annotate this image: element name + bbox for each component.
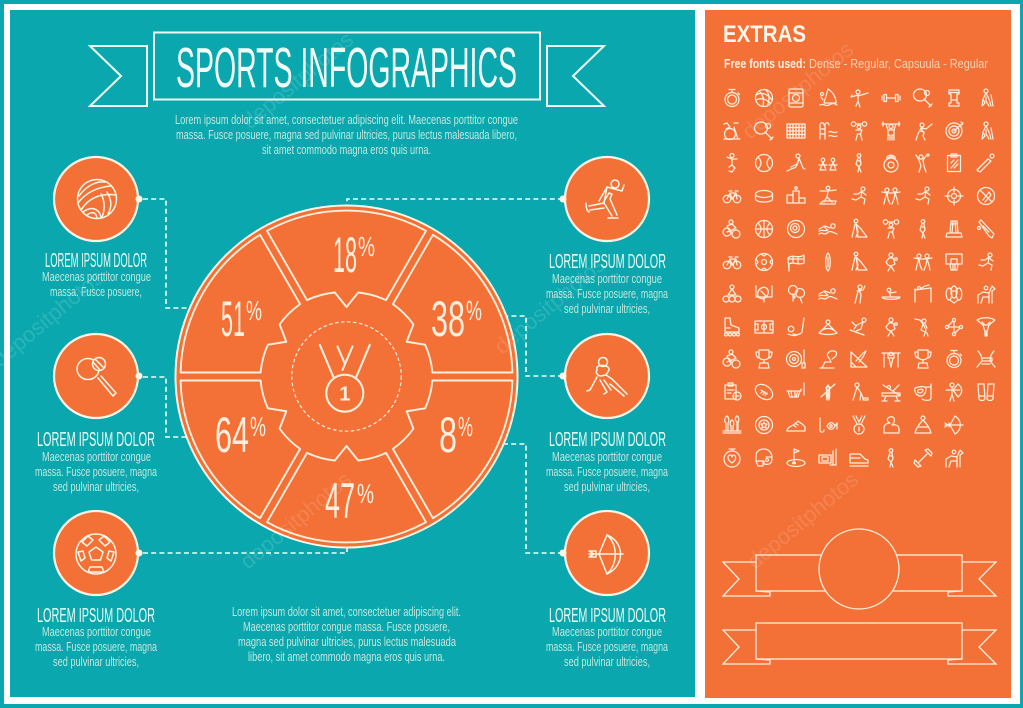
value 51%: 51 [221,291,245,347]
body: massa. Fusce posuere, magna [546,287,668,301]
fonts note [724,57,988,71]
body: massa. Fusce posuere, magna [546,640,668,654]
intro text: sit amet commodo magna eros quis urna. [262,143,431,157]
panel: extras orange [705,10,1011,698]
footer text [232,605,461,664]
intro text: massa. Fusce posuere, magna sed pulvinar ultricies, purus lectus malesuada libero, [176,128,517,142]
body: sed pulvinar ultricies, [564,302,650,316]
circle badge [560,511,649,595]
value 18%: % [358,231,375,262]
intro text: Lorem ipsum dolor sit amet, consectetuer adipiscing elit. Maecenas porttitor congue [175,113,518,127]
body: Maecenas porttitor congue [552,272,662,286]
icon: medal [320,345,370,412]
row 12 icons [724,449,963,467]
text: LOREM IPSUM DOLOR [45,250,147,272]
value 64%: 64 [215,407,249,463]
circle badge [54,334,142,418]
row 10 icons [725,381,994,403]
circle badge [54,511,142,595]
body: sed pulvinar ultricies, [564,480,650,494]
fonts note: Free fonts used: [724,57,806,71]
icon: medal: 1 [339,384,350,406]
body: Maecenas porttitor congue [42,625,151,639]
circle badge [54,157,142,241]
row 7 icons [723,285,995,303]
body: massa. Fusce posuere, [50,285,142,299]
heading: LOREM IPSUM DOLOR [549,251,666,273]
row 1 icons [725,89,993,107]
icon: volleyball [78,180,116,218]
fonts note: Dense - Regular, Capsuula - Regular [809,57,988,71]
body [35,625,157,669]
footer text: Lorem ipsum dolor sit amet, consectetuer adipiscing elit. [232,605,461,619]
ribbon plain [723,623,996,664]
dashed inner ring [292,322,401,431]
circle badge [560,334,649,418]
icon: speed skater [586,180,624,218]
value 47%: 47 [325,473,355,529]
callout: archery [546,511,668,669]
extras heading: EXTRAS [723,21,806,48]
wheel disc [176,206,518,548]
callout: hockey [546,334,668,494]
title banner: SPORTS INFOGRAPHICS [176,36,517,100]
panel: main teal [10,10,695,697]
value 51%: % [246,295,262,326]
callout: volleyball [42,157,151,299]
footer text: libero, sit amet commodo magna eros quis urna. [248,650,445,664]
wheel chart [163,206,530,548]
body [546,272,668,316]
heading: LOREM IPSUM DOLOR [549,429,666,451]
icon: racket and ball [77,358,116,396]
body [35,450,157,494]
ribbon with circle [723,529,996,609]
callout: skater [546,157,668,316]
heading: LOREM IPSUM DOLOR [549,605,666,627]
watermarks [0,27,863,574]
heading: LOREM IPSUM DOLOR [37,429,155,451]
value 8%: 8 [439,407,457,463]
body [546,450,668,494]
value 8%: % [458,411,473,442]
watermarks: depositphotos [489,252,610,359]
title box [154,32,540,100]
intro text [175,113,518,157]
watermarks: depositphotos [235,467,356,574]
row 2 icons [724,122,993,140]
icon: bow and arrow [589,535,623,574]
callout: tennis [35,334,157,494]
body [546,625,668,669]
row 5 icons [723,219,994,238]
footer text: magna sed pulvinar ultricies, purus lectus malesuada [238,635,456,649]
body: massa. Fusce posuere, magna [546,465,668,479]
body: sed pulvinar ultricies, [564,655,650,669]
body [42,270,151,299]
value 18%: 18 [333,227,357,283]
value 47%: % [357,478,374,509]
watermarks: depositphotos [237,27,358,134]
footer text: Maecenas porttitor congue massa. Fusce posuere, [243,620,450,634]
body: sed pulvinar ultricies, [53,480,139,494]
circle badge [560,157,649,241]
callout: soccer [35,511,157,669]
wheel segments [163,211,530,542]
value 64%: % [250,411,266,442]
title banner [90,32,604,106]
body: Maecenas porttitor congue [552,450,662,464]
value 38%: % [466,295,482,326]
body: sed pulvinar ultricies, [53,655,139,669]
ribbon right [547,46,604,106]
icon: soccer ball [76,534,116,574]
watermarks: depositphotos [742,467,863,574]
row 3 icons [727,154,994,172]
icon set grid [723,89,995,467]
row 8 icons [724,318,995,336]
row 9 icons [723,350,995,368]
body: Maecenas porttitor congue [42,450,151,464]
ribbon left [90,46,147,106]
icon: hockey player [587,358,627,396]
value 38%: 38 [431,291,465,347]
body: Maecenas porttitor congue [42,270,151,284]
dashed connectors [143,199,563,553]
row 4 icons [723,186,994,205]
body: Maecenas porttitor congue [552,625,662,639]
row 6 icons [723,252,993,271]
heading: LOREM IPSUM DOLOR [37,605,155,627]
row 11 icons [723,416,963,434]
body: massa. Fusce posuere, magna [35,465,157,479]
watermarks: depositphotos [737,37,858,144]
body: massa. Fusce posuere, magna [35,640,157,654]
